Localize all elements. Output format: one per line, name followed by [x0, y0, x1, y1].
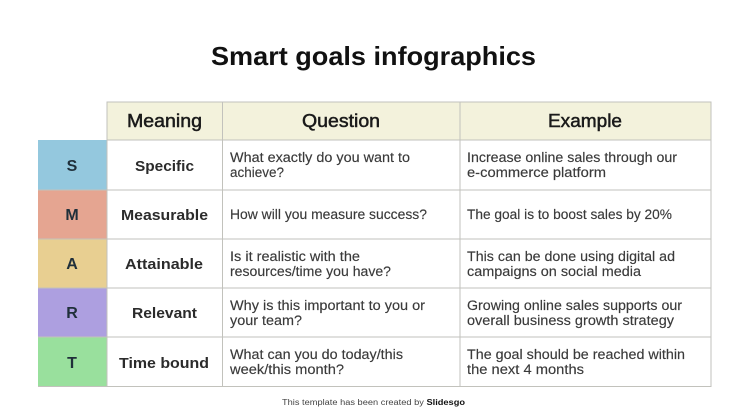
- footer credit: This template has been created by Slidesgo: [282, 398, 465, 407]
- row: Time bound: What can you do today/this: [230, 347, 403, 362]
- letter cell: R: R: [66, 305, 78, 322]
- row: Relevant: [132, 298, 683, 328]
- row: Relevant: Relevant: [132, 305, 197, 322]
- letter cell: R: [38, 288, 107, 337]
- row: Specific: [135, 150, 678, 180]
- row: Specific: Increase online sales through our: [467, 150, 678, 165]
- row: Specific: achieve?: [230, 165, 284, 180]
- heading: Example: Example: [548, 111, 622, 131]
- letter cell: T: T: [67, 355, 77, 372]
- row: Measurable: Measurable: [121, 207, 208, 224]
- row: Attainable: campaigns on social media: [467, 264, 642, 279]
- letter cell: T: [38, 337, 107, 387]
- row: Time bound: Time bound: [119, 355, 209, 372]
- row: Relevant: Growing online sales supports our: [467, 298, 683, 313]
- row: Specific: What exactly do you want to: [230, 150, 410, 165]
- heading: Question: Question: [302, 111, 380, 131]
- row: Attainable: Attainable: [125, 256, 203, 273]
- row: Measurable: How will you measure success?: [230, 207, 427, 222]
- header row: [107, 102, 711, 140]
- letter cell: S: [38, 140, 107, 190]
- row: Time bound: The goal should be reached within: [467, 347, 685, 362]
- row: Time bound: the next 4 months: [467, 362, 584, 377]
- row: Attainable: [125, 249, 675, 279]
- title: Smart goals infographics: [211, 41, 536, 71]
- row: Time bound: [119, 347, 685, 377]
- letter cell: M: [38, 190, 107, 239]
- row: Specific: Specific: [135, 158, 194, 175]
- row: Measurable: The goal is to boost sales by 20%: [467, 207, 672, 222]
- letter cell: S: S: [67, 158, 78, 175]
- row: Attainable: resources/time you have?: [230, 264, 391, 279]
- row: Relevant: Why is this important to you or: [230, 298, 426, 313]
- row: Time bound: week/this month?: [229, 362, 344, 377]
- row: Specific: e-commerce platform: [467, 165, 606, 180]
- row: Attainable: This can be done using digital ad: [467, 249, 675, 264]
- row: Attainable: Is it realistic with the: [230, 249, 360, 264]
- letter cell: A: A: [66, 256, 78, 273]
- row: Relevant: overall business growth strategy: [467, 313, 674, 328]
- letter cell: M: M: [65, 207, 79, 224]
- heading: Meaning: Meaning: [127, 111, 202, 131]
- letter cell: A: [38, 239, 107, 288]
- table: SMART goals: [38, 102, 711, 387]
- row: Measurable: [121, 207, 672, 224]
- row: Relevant: your team?: [230, 313, 302, 328]
